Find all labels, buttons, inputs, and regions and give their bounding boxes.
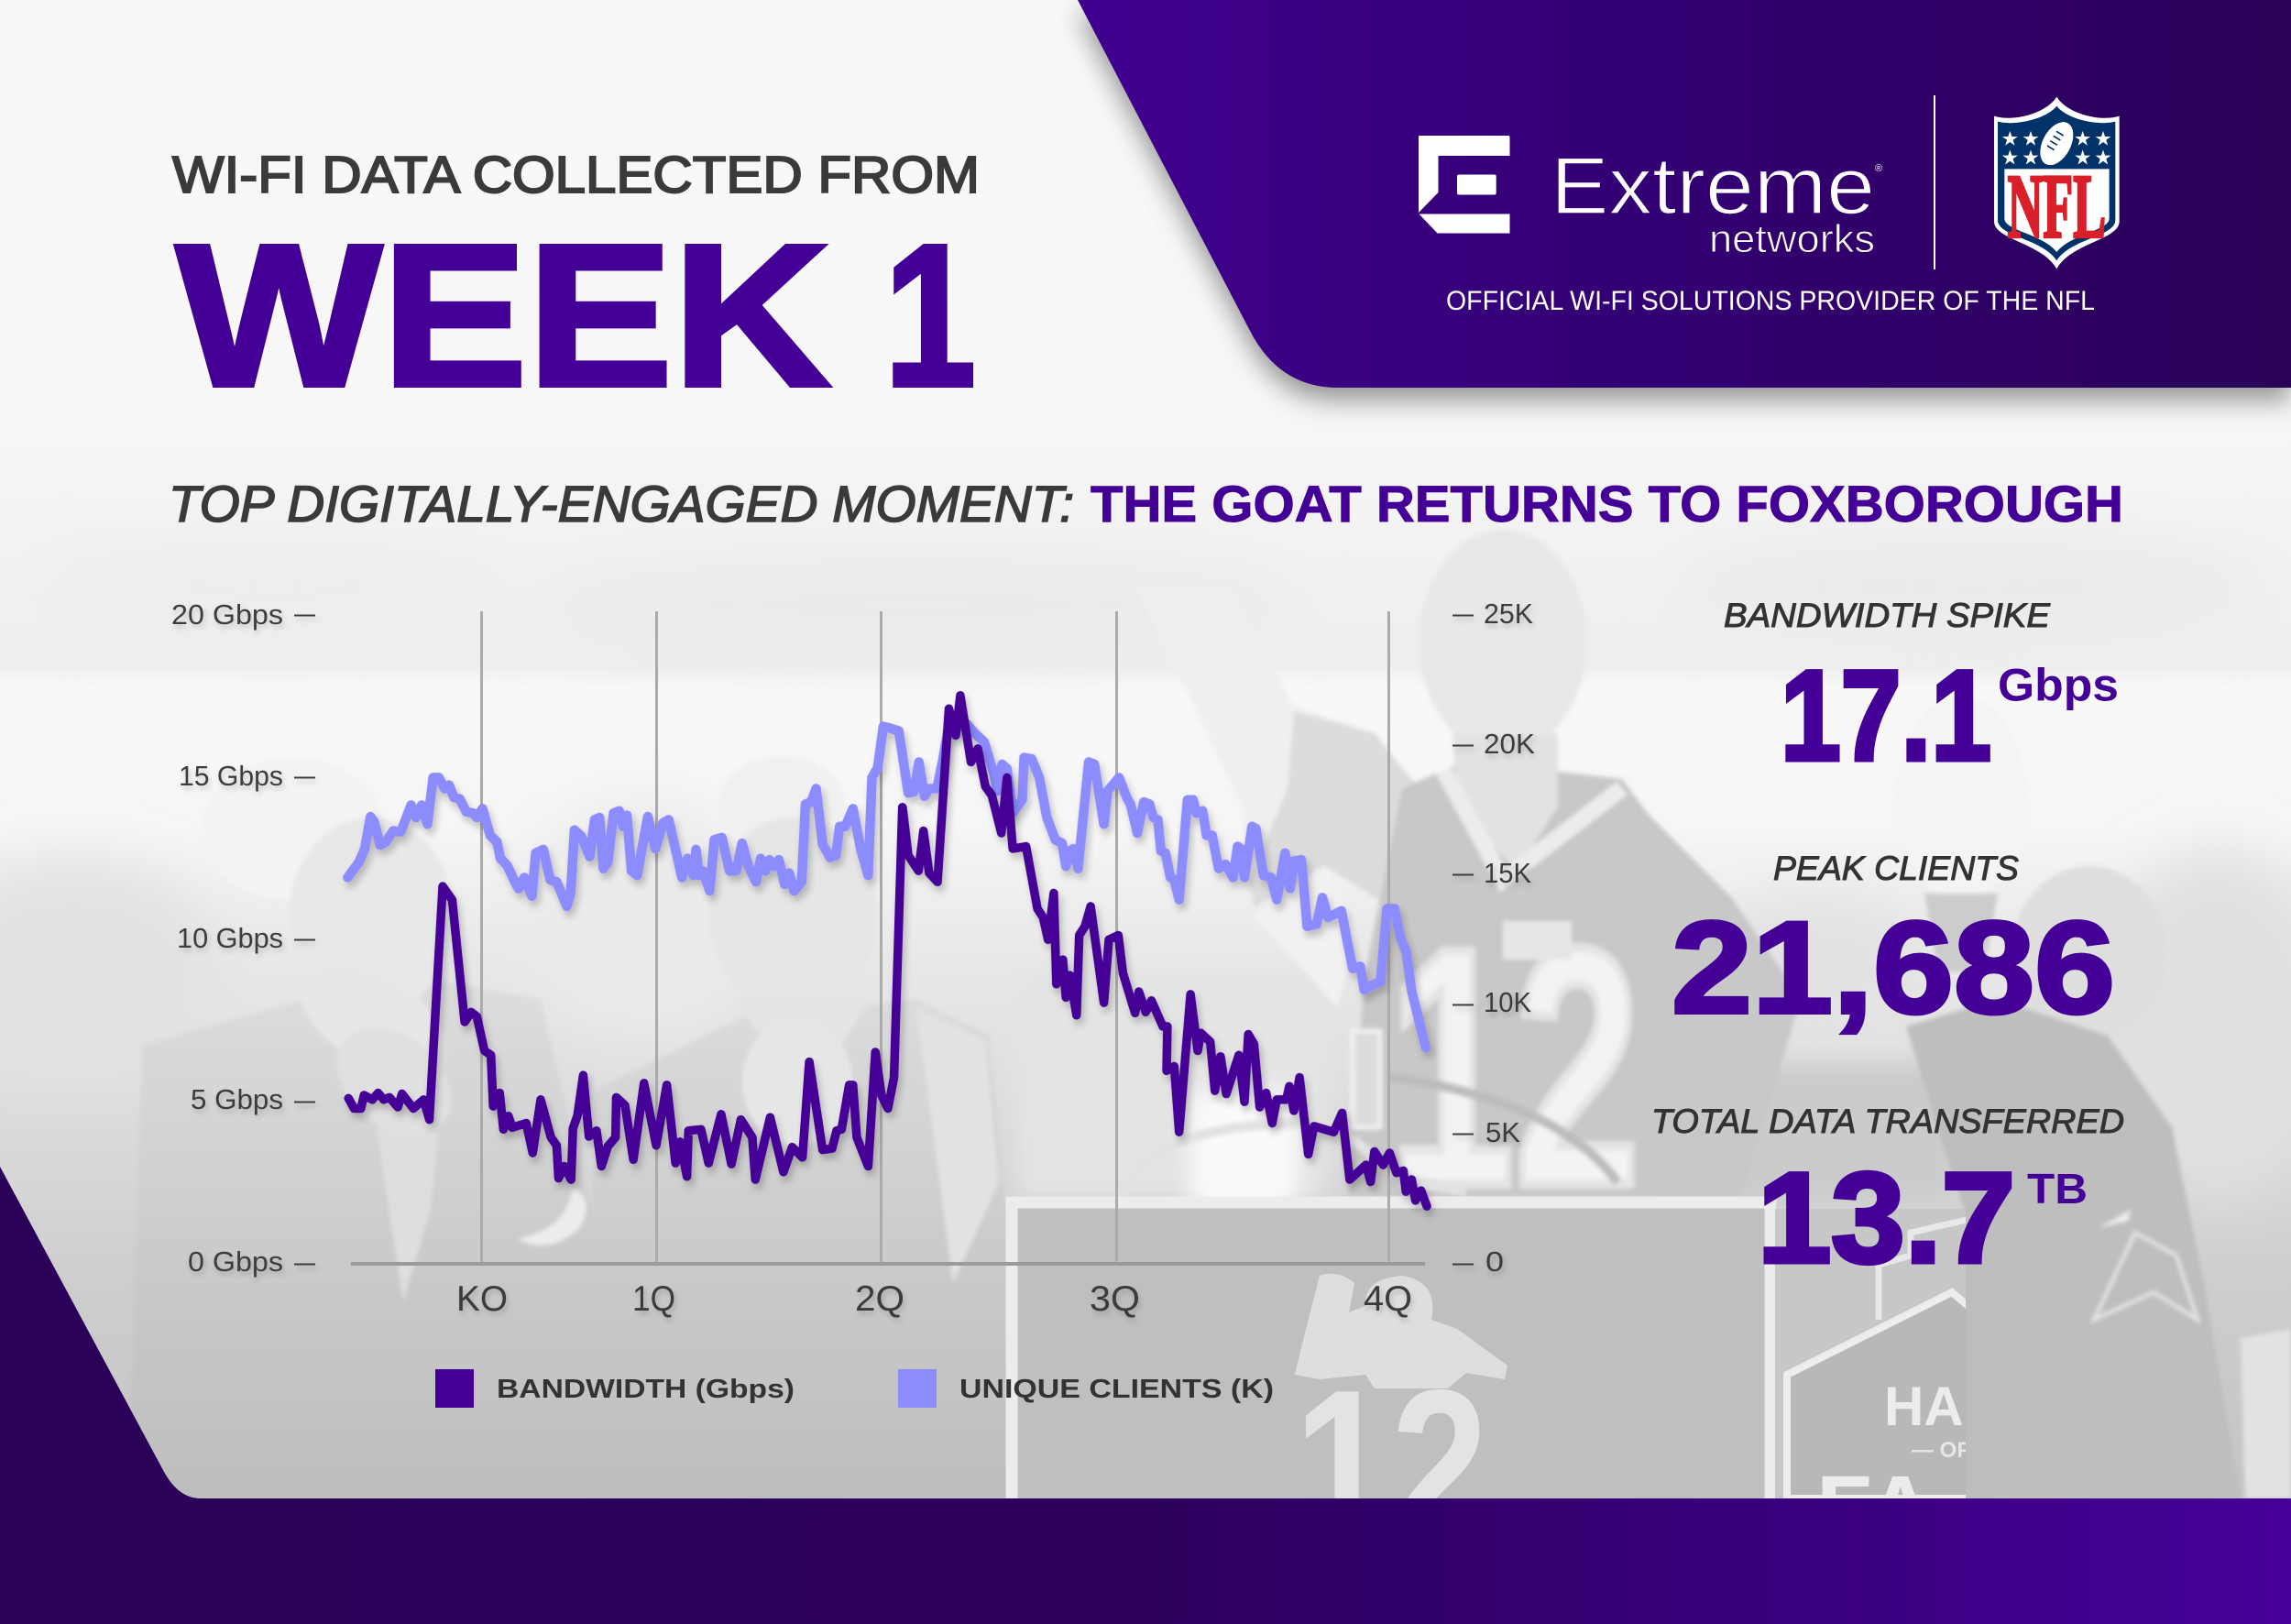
chart: bandwidth and unique clients over game [171, 598, 1535, 1408]
podium: 12 [1294, 1344, 1488, 1586]
icon: nfl shield [1994, 97, 2120, 269]
stat: total data transferred: 13.7 [1758, 1146, 2015, 1289]
left axis labels: gbps: 5 Gbps [191, 1083, 283, 1115]
right axis labels: clients: 25K [1484, 598, 1533, 630]
x axis quarter labels: 3Q [1090, 1279, 1140, 1319]
hall of fame sign: FA [1816, 1457, 1934, 1560]
chart gridlines and baseline [351, 611, 1425, 1266]
stat: bandwidth spike: Gbps [1998, 660, 2119, 711]
brady: 12 [1388, 878, 1640, 1256]
left axis labels: gbps: 10 Gbps [177, 922, 283, 954]
legend: bandwidth: BANDWIDTH (Gbps) [497, 1375, 795, 1404]
legend: bandwidth [435, 1369, 795, 1408]
x axis quarter labels: 4Q [1364, 1279, 1412, 1319]
divider: logo separator [1934, 95, 1935, 269]
logo text: extreme networks [1551, 140, 1882, 261]
left axis labels: gbps: 20 Gbps [171, 598, 283, 631]
caption: official wi-fi solutions provider: OFFICIAL WI-FI SOLUTIONS PROVIDER OF THE NFL [1446, 286, 2095, 316]
stat: peak clients: PEAK CLIENTS [1773, 850, 2019, 887]
x axis quarter labels: KO [456, 1279, 508, 1319]
stat: bandwidth spike: BANDWIDTH SPIKE [1724, 597, 2051, 634]
center man [586, 756, 1026, 1498]
right axis labels: clients: 10K [1484, 986, 1531, 1018]
x axis quarter labels: 2Q [855, 1279, 904, 1319]
legend: unique clients: UNIQUE CLIENTS (K) [959, 1375, 1274, 1404]
right axis labels: clients: 20K [1484, 728, 1535, 760]
brady [1136, 530, 1801, 1256]
right axis labels: clients: 5K [1485, 1116, 1520, 1148]
left axis labels: gbps: 0 Gbps [188, 1245, 283, 1278]
x axis quarter labels: 1Q [632, 1279, 675, 1319]
icon: nfl shield: NFL [2008, 155, 2106, 257]
logo text: extreme networks: ® [1875, 163, 1882, 174]
left axis labels: gbps [171, 598, 315, 1278]
right axis labels: clients: 15K [1484, 857, 1531, 889]
x axis quarter labels [456, 1279, 1412, 1319]
subheading: the goat returns to foxborough: THE GOAT RETURNS TO FOXBOROUGH [1091, 475, 2123, 532]
left man [128, 758, 664, 1498]
podium [1012, 1202, 1770, 1586]
line: unique clients [347, 719, 1426, 1048]
heading: week 1: 1 [884, 202, 976, 429]
stat: bandwidth spike [1724, 597, 2119, 787]
stat: total data transferred: TB [2027, 1165, 2088, 1213]
stat: total data transferred: TOTAL DATA TRANSFERRED [1651, 1103, 2124, 1140]
microphones and cables [1123, 1031, 1617, 1196]
stat: peak clients [1672, 850, 2115, 1041]
right axis labels: clients: 0 [1485, 1245, 1504, 1278]
left axis labels: gbps: 15 Gbps [179, 760, 283, 792]
stat: bandwidth spike: 17.1 [1781, 643, 1991, 787]
right axis labels: clients [1452, 598, 1535, 1278]
stat: total data transferred [1651, 1103, 2124, 1289]
legend: unique clients [898, 1369, 1274, 1408]
heading: week 1: WEEK [176, 202, 830, 429]
panel: bottom purple band with left diagonal [0, 1167, 2291, 1624]
stat: peak clients: 21,686 [1672, 895, 2115, 1041]
hall of fame sign: HA [1884, 1376, 1964, 1437]
hall of fame sign [1775, 1209, 1993, 1560]
subheading: top digitally-engaged moment: TOP DIGITALLY-ENGAGED MOMENT: [169, 475, 1074, 532]
line: bandwidth [348, 696, 1427, 1206]
logo text: extreme networks: networks [1709, 217, 1875, 261]
heading: wi-fi data collected from: WI-FI DATA COLLECTED FROM [172, 146, 980, 204]
right woman and trophy [1895, 697, 2291, 1498]
icon: extreme networks logo mark [1419, 136, 1510, 233]
panel: top-right purple header [1078, 0, 2291, 388]
logo text: extreme networks: Extreme [1551, 140, 1875, 231]
hall of fame sign: — OF [1912, 1438, 1970, 1463]
